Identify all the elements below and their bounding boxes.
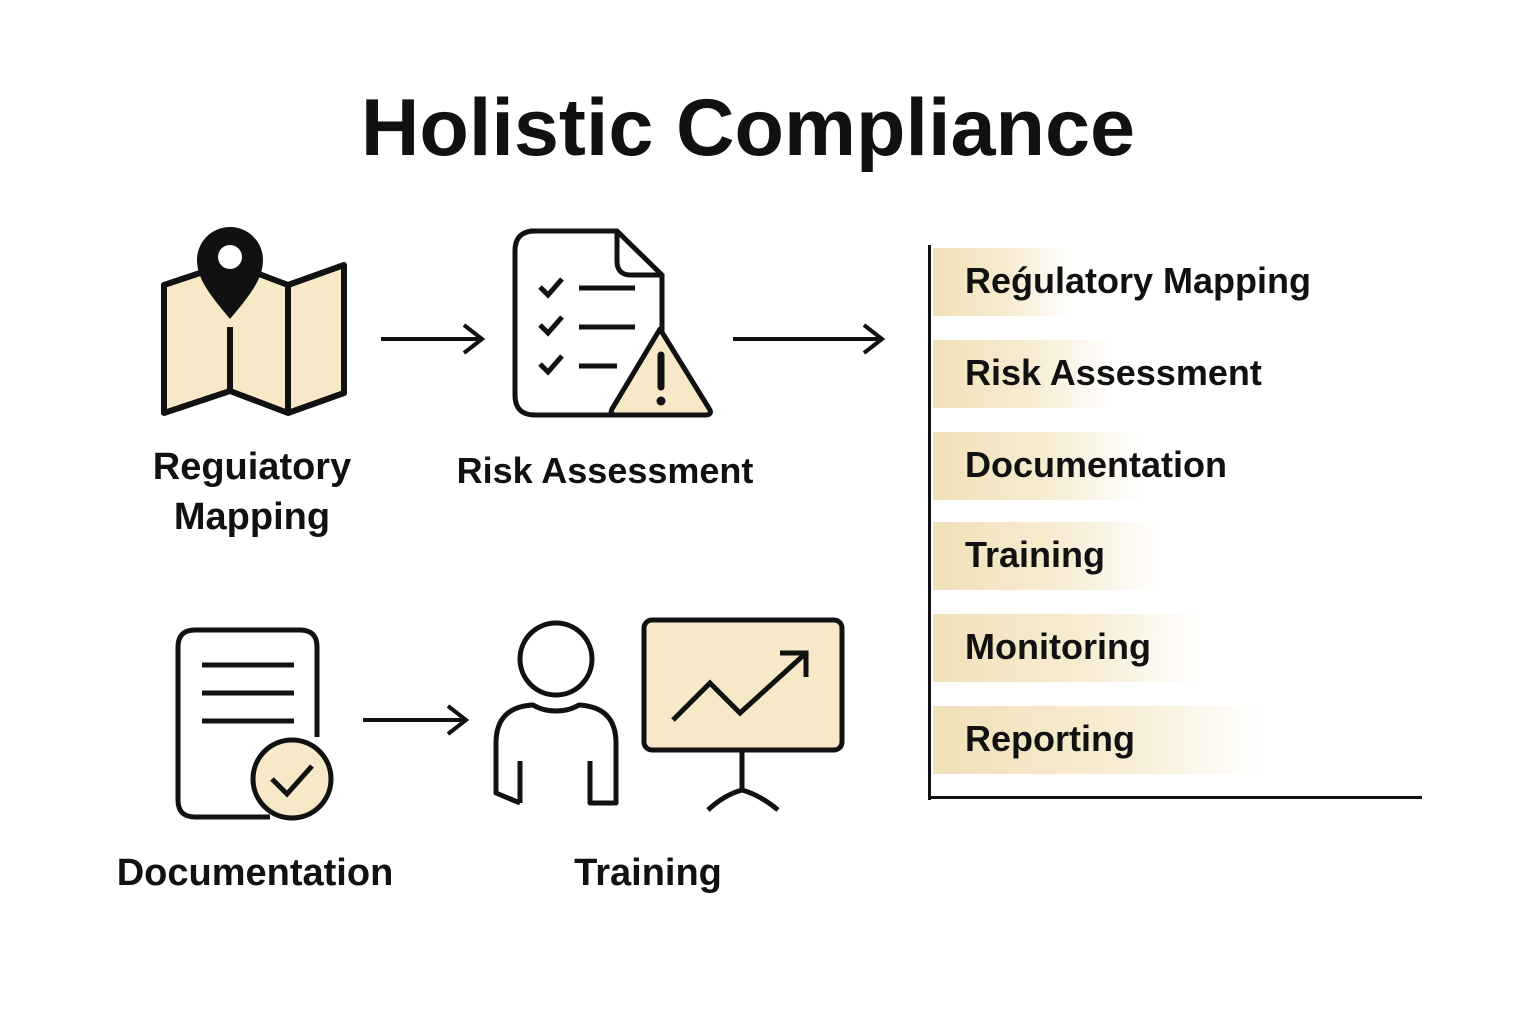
label: regulatory mapping [153,446,351,538]
icon: document with check [176,628,334,820]
bar label: documentation: Documentation [965,444,1227,485]
bar label: training: Training [965,534,1105,575]
icon: checklist with warning [512,228,713,418]
title: Holistic Compliance [361,83,1135,173]
bar: monitoring [933,614,1203,682]
bar label: risk assessment: Risk Assessment [965,352,1262,393]
chart: compliance components [928,245,1422,800]
label: regulatory mapping: Mapping [174,496,330,538]
bar label: monitoring: Monitoring [965,626,1151,667]
arrow 3 [363,704,470,736]
bar: training [933,522,1163,590]
bar: risk assessment [933,340,1113,408]
bar: regulatory mapping [933,248,1073,316]
icon: map with pin [161,227,347,416]
icon: trainer with chart board [494,618,844,812]
label: risk assessment: Risk Assessment [457,450,753,491]
arrow 1 [381,323,486,355]
axes [928,245,931,800]
arrow 2 [733,323,886,355]
label: regulatory mapping: Reguiatory [153,446,351,488]
bar label: regulatory mapping: Reǵulatory Mapping [965,260,1311,301]
bar label: reporting: Reporting [965,718,1135,759]
label: documentation: Documentation [117,852,393,894]
bar: documentation [933,432,1143,500]
bar: reporting [933,706,1263,774]
label: training: Training [574,852,722,894]
